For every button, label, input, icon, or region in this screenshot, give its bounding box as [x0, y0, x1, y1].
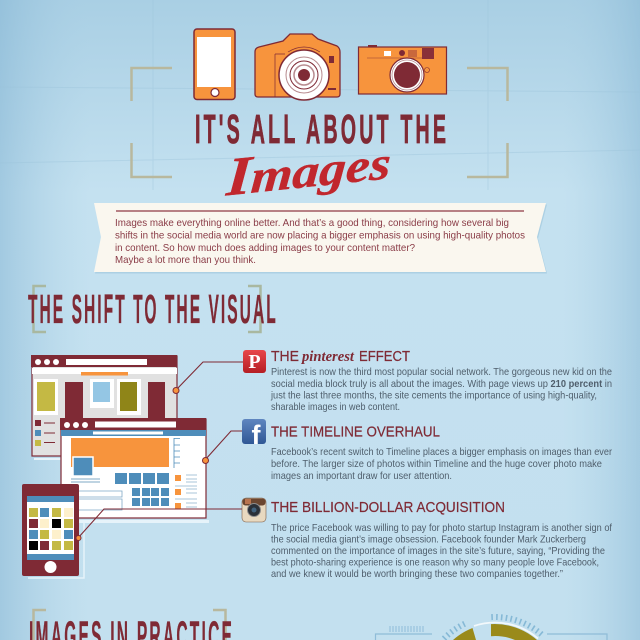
illustration: smartphone: [22, 484, 84, 578]
intro banner: Maybe a lot more than you think.: [115, 254, 256, 266]
text block: the timeline overhaul: before. The larger size of photos within Timeline and the huge cover photo make: [271, 458, 602, 470]
icon: pinterest: P: [248, 351, 261, 373]
text block: the billion-dollar acquisition: best photo-sharing experience is one reason why so many people love Facebook,: [271, 556, 599, 568]
section heading: the shift to the visual: THE SHIFT TO THE VISUAL: [28, 286, 276, 332]
text block: the pinterest effect: just the last three months, the site cements the importance of using high-quality,: [270, 390, 597, 402]
illustration: browser window one: [31, 355, 177, 460]
intro banner: Images make everything online better. And that’s a good thing, considering how several big: [115, 217, 509, 229]
title: Images: [224, 130, 393, 208]
chart: donut gauge (cropped): [376, 617, 607, 640]
intro banner: shifts in the social media world are now placing a bigger emphasis on using high-quality photos: [115, 230, 525, 242]
icon: SLR camera: [255, 34, 340, 100]
title: IT'S ALL ABOUT THE: [195, 106, 446, 152]
illustration: browser window two: [60, 418, 209, 523]
text block: the timeline overhaul: [271, 424, 612, 482]
text block: the billion-dollar acquisition: and we knew it would be worth bringing these two companies together.”: [271, 568, 563, 580]
connector lines: [78, 362, 244, 538]
text block: the billion-dollar acquisition: [271, 500, 612, 580]
text block: the pinterest effect: [270, 349, 612, 413]
icon: facebook: f: [252, 420, 262, 450]
connector dots: [76, 388, 208, 540]
icon: smartphone: [194, 29, 235, 100]
intro banner: in content. So how much does adding images to your content matter?: [115, 242, 415, 254]
icon: facebook: [242, 419, 266, 450]
title: [195, 106, 446, 208]
viewfinder brackets: [132, 68, 508, 177]
text block: the pinterest effect: pinterest: [300, 349, 355, 365]
text block: the billion-dollar acquisition: the social media giant’s image obsession. Facebook founder Mark Zuckerberg: [271, 534, 586, 546]
icon: instagram: [242, 498, 266, 522]
icon: rangefinder camera: [358, 45, 446, 94]
text block: the billion-dollar acquisition: THE BILLION-DOLLAR ACQUISITION: [271, 500, 505, 516]
intro banner: [94, 203, 547, 274]
text block: the pinterest effect: THE: [271, 349, 299, 365]
text block: the pinterest effect: sharable images in web content.: [271, 401, 400, 413]
text block: the timeline overhaul: images an important draw for user attention.: [271, 470, 452, 482]
text block: the timeline overhaul: THE TIMELINE OVERHAUL: [271, 424, 440, 440]
icon: pinterest: [243, 350, 266, 373]
text block: the pinterest effect: EFFECT: [359, 349, 410, 365]
text block: the pinterest effect: social media block truly is all about the images. With page views up 210 percent in: [271, 378, 612, 390]
